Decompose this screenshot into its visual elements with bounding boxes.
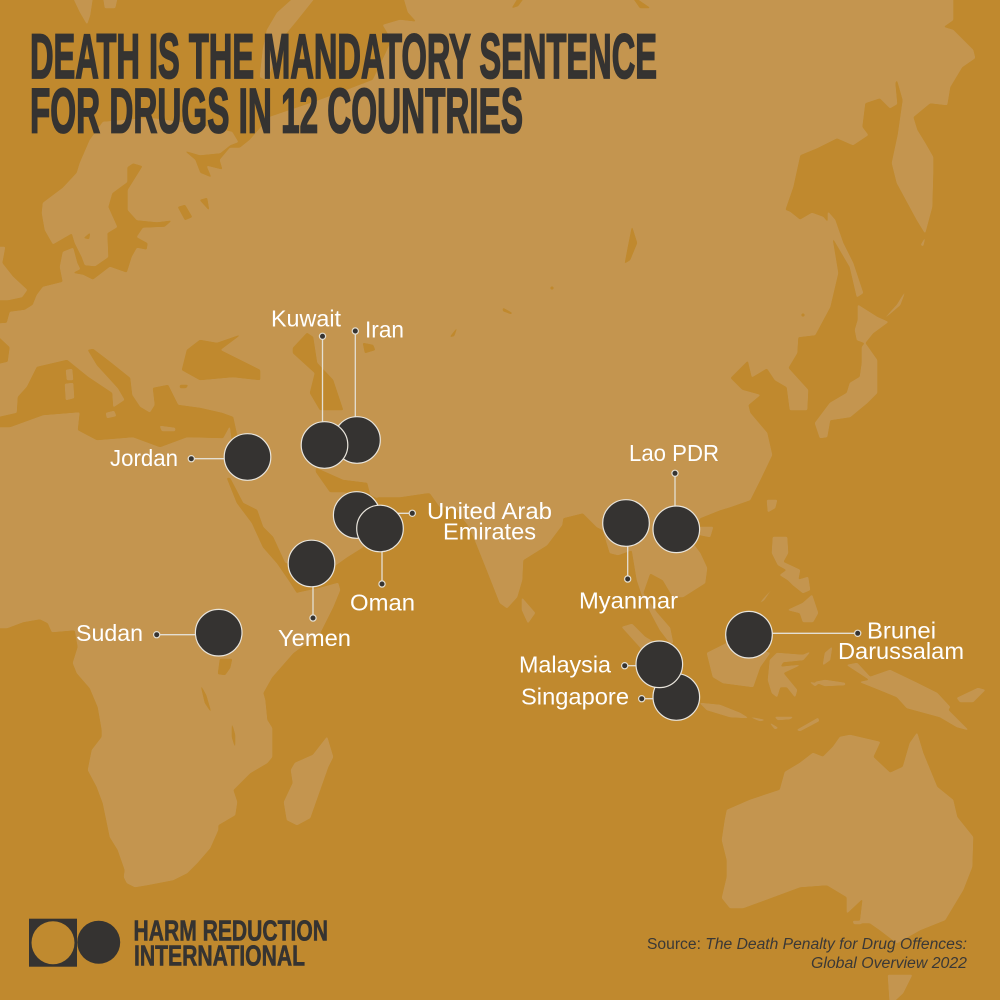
logo: Harm Reduction International bbox=[29, 916, 328, 973]
islands: Japan and Sakhalin bbox=[815, 212, 925, 438]
source note bbox=[647, 936, 967, 972]
Sulawesi bbox=[768, 652, 810, 697]
Sumatra bbox=[622, 624, 680, 683]
marker: Malaysia bbox=[519, 641, 683, 688]
marker: Brunei Darussalam bbox=[726, 611, 964, 664]
marker: Kuwait bbox=[271, 306, 348, 468]
Caspian Sea bbox=[293, 333, 343, 410]
source note: Source: The Death Penalty for Drug Offences: bbox=[647, 936, 967, 953]
marker: Myanmar bbox=[579, 500, 678, 614]
marker: Myanmar: Myanmar bbox=[579, 588, 678, 614]
New Guinea and nearby islands bbox=[810, 647, 985, 730]
marker: Iran bbox=[334, 316, 404, 463]
title bbox=[30, 22, 657, 146]
islands: Taiwan and Hainan bbox=[700, 500, 777, 537]
marker: Singapore: Singapore bbox=[521, 684, 629, 710]
source note: Global Overview 2022 bbox=[811, 955, 967, 972]
marker: Oman bbox=[350, 505, 415, 616]
logo wordmark: HARM REDUCTION bbox=[134, 916, 328, 948]
logo wordmark bbox=[134, 916, 328, 973]
Madagascar bbox=[284, 737, 333, 825]
marker: Sudan: Sudan bbox=[76, 620, 143, 646]
Kangaroo Island bbox=[853, 921, 861, 924]
marker: Jordan bbox=[110, 434, 271, 480]
title: FOR DRUGS IN 12 COUNTRIES bbox=[30, 76, 523, 146]
marker: Yemen bbox=[278, 540, 351, 651]
icon: filled circle bbox=[77, 921, 120, 964]
marker: Sudan bbox=[76, 609, 242, 656]
marker: Brunei Darussalam: Brunei bbox=[867, 618, 936, 644]
Borneo bbox=[707, 643, 770, 687]
Australia bbox=[722, 733, 973, 943]
marker: United Arab Emirates: Emirates bbox=[443, 518, 536, 544]
icon: square with circle bbox=[29, 919, 77, 967]
marker: Lao PDR bbox=[629, 440, 719, 553]
marker: Malaysia: Malaysia bbox=[519, 652, 611, 678]
marker: Jordan: Jordan bbox=[110, 445, 178, 471]
marker: Brunei Darussalam: Darussalam bbox=[838, 638, 964, 664]
marker: Yemen: Yemen bbox=[278, 625, 351, 651]
marker: Iran: Iran bbox=[365, 316, 404, 342]
Philippines bbox=[760, 537, 818, 622]
marker: Singapore bbox=[521, 674, 700, 720]
Java and Lesser Sunda islands bbox=[700, 703, 819, 731]
Black Sea bbox=[182, 335, 260, 380]
Mediterranean Sea bbox=[0, 349, 238, 448]
logo wordmark: INTERNATIONAL bbox=[134, 941, 305, 973]
Red Sea bbox=[227, 478, 305, 593]
marker: United Arab Emirates bbox=[333, 492, 552, 544]
marker: Kuwait: Kuwait bbox=[271, 306, 342, 332]
top sea fragments bbox=[512, 0, 650, 8]
islands: Arctic and Europe bbox=[0, 0, 317, 431]
Tasmania bbox=[888, 975, 912, 1000]
marker: United Arab Emirates: United Arab bbox=[427, 498, 552, 524]
marker: Oman: Oman bbox=[350, 590, 415, 616]
Persian Gulf bbox=[316, 468, 380, 505]
marker: Lao PDR: Lao PDR bbox=[629, 440, 719, 466]
inland lakes bbox=[84, 198, 804, 747]
Sri Lanka bbox=[522, 598, 535, 623]
